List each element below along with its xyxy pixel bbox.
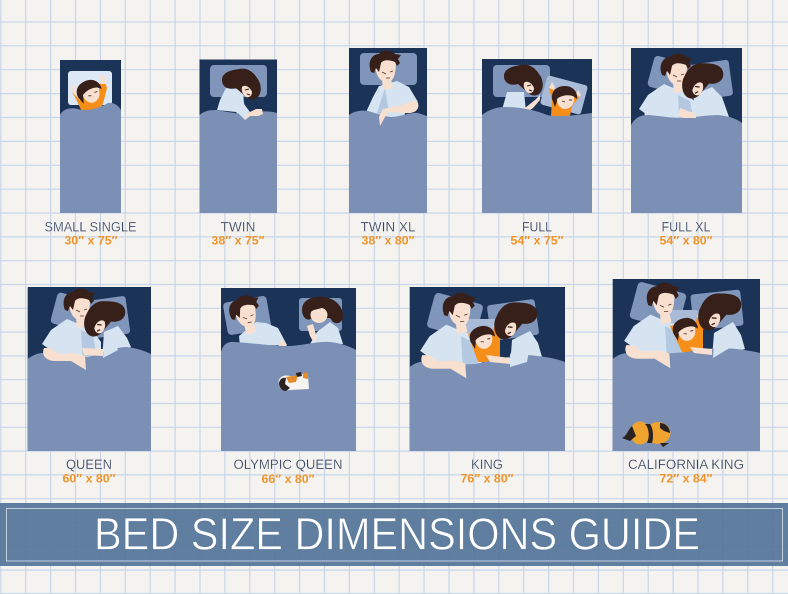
label: full xl [660,220,713,248]
bed: full [482,59,592,213]
blanket [200,110,277,213]
label: olympic queen [234,457,342,486]
woman [695,290,745,358]
label: olympic queen: OLYMPIC QUEEN [234,457,342,472]
pillow [210,65,267,97]
label: king: KING [471,457,503,472]
pillow [360,53,417,85]
man [42,289,101,368]
label: california king: CALIFORNIA KING [628,457,744,472]
label: twin: TWIN [220,220,256,234]
pillow: man [629,281,687,331]
label: california king: 72″ x 84″ [660,474,713,486]
arms [421,340,530,378]
label: small single [44,220,136,248]
blanket [221,342,356,451]
bed: twin [200,60,277,213]
blanket [613,348,760,451]
arms [625,327,733,368]
arm [678,108,696,118]
label: small single: SMALL SINGLE [44,220,136,234]
label: small single: 30″ x 75″ [64,236,118,248]
woman [491,299,542,368]
woman [302,297,343,344]
blanket [349,111,427,213]
woman [679,60,729,120]
label: twin xl [360,220,416,248]
label: king: 76″ x 80″ [460,474,514,486]
woman [81,298,131,360]
label: king [460,457,514,486]
label: twin [212,220,265,248]
pillow [68,71,112,105]
bed: olympic queen [221,288,356,451]
pillow: man [50,292,116,338]
pillow: man [223,295,272,336]
blanket [631,115,742,213]
woman [502,65,543,113]
pillow: child [465,319,497,344]
label: california king [628,457,744,486]
label: twin: 38″ x 75″ [212,236,265,248]
label: queen: 60″ x 80″ [62,474,116,486]
bed: twin xl [349,48,427,213]
dog [622,422,670,447]
blanket [410,355,565,451]
bed: full xl [631,48,742,213]
blanket [60,103,121,213]
bed: small single [60,60,121,213]
blanket [482,107,592,213]
pillow: child [669,310,699,334]
bed: queen [28,287,151,451]
pillow: child [540,75,588,115]
man [367,51,418,118]
man [420,293,482,376]
man [227,293,287,347]
label: full [510,220,564,248]
bed: california king [613,279,760,451]
arm [240,109,263,120]
pillow: adult [493,65,550,97]
label: twin xl: 38″ x 80″ [362,236,415,248]
title: BED SIZE DIMENSIONS GUIDE [94,508,700,560]
arms [43,335,118,370]
child [71,75,107,112]
pillow: woman [487,299,539,341]
bed: king [410,287,565,451]
pillow: woman [299,298,342,331]
child [468,321,500,362]
label: full: 54″ x 75″ [510,236,564,248]
woman [217,69,261,121]
pillow: woman [90,296,130,338]
pillow: woman [691,60,733,100]
label: full xl: 54″ x 80″ [660,236,713,248]
label: queen [62,457,116,486]
blanket [28,347,151,451]
child [549,82,581,116]
label: full: FULL [522,220,552,234]
pillow: woman [690,289,744,331]
man [639,54,698,133]
title banner [0,503,788,566]
pillow: man [426,292,484,340]
label: queen: QUEEN [66,457,112,472]
sleeve [234,100,247,120]
pillow: man [647,55,711,101]
label: olympic queen: 66″ x 80″ [262,474,315,486]
man [624,283,686,366]
cat [279,372,309,391]
arm [379,100,418,126]
label: twin xl: TWIN XL [360,220,416,234]
label: full xl: FULL XL [662,220,711,234]
child [670,312,703,352]
